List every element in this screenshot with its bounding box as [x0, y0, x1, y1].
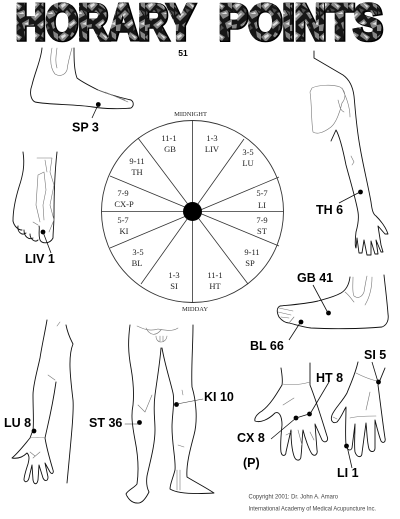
point: LU 8	[32, 429, 36, 433]
wheel labels: SP	[245, 258, 255, 268]
label: CX 8: CX 8	[237, 431, 265, 445]
point: BL 66	[289, 320, 303, 340]
wheel labels: 1-3	[168, 270, 180, 280]
wheel labels: 5-7	[256, 188, 268, 198]
wheel labels: 9-11	[129, 156, 145, 166]
clock wheel chart	[102, 111, 284, 313]
label: ST 36: ST 36	[89, 416, 122, 430]
wheel labels: MIDDAY	[182, 306, 208, 313]
label: BL 66: BL 66	[250, 339, 284, 353]
wheel labels: 3-5	[242, 147, 254, 157]
legs: ST 36 and KI 10	[89, 325, 234, 503]
label: LIV 1: LIV 1	[25, 252, 55, 266]
point: SI 5	[372, 362, 381, 384]
wheel labels: 3-5	[132, 247, 144, 257]
title	[15, 0, 383, 50]
label: LI 1: LI 1	[337, 466, 359, 480]
copyright: International Academy of Medical Acupuncture Inc.	[248, 506, 376, 512]
wheel labels: ST	[257, 226, 268, 236]
label: GB 41: GB 41	[297, 271, 333, 285]
wheel labels: KI	[120, 226, 129, 236]
arm: TH 6	[310, 51, 388, 255]
wheel labels: 11-1	[161, 133, 177, 143]
palm hand: HT 8 and CX 8	[237, 363, 343, 470]
point: TH 6	[339, 190, 363, 203]
point: LIV 1	[41, 230, 51, 253]
wheel labels: LI	[258, 200, 266, 210]
wheel labels: 1-3	[206, 133, 218, 143]
wheel labels: MIDNIGHT	[174, 111, 207, 118]
center dot	[183, 202, 202, 221]
wheel labels: GB	[164, 144, 176, 154]
wheel labels: LIV	[205, 144, 220, 154]
point: HT 8	[307, 382, 329, 416]
label: HT 8: HT 8	[316, 371, 343, 385]
point: SP 3	[92, 102, 101, 118]
wheel labels: SI	[170, 281, 178, 291]
copyright: Copyright 2001: Dr. John A. Amaro	[248, 494, 338, 500]
point: KI 10	[174, 399, 203, 407]
point: GB 41	[313, 285, 331, 315]
wheel labels: 7-9	[256, 215, 268, 225]
foot: SP 3	[31, 48, 133, 134]
point: ST 36	[125, 420, 142, 425]
label: LU 8: LU 8	[4, 416, 31, 430]
wheel labels: BL	[132, 258, 142, 268]
back hand: SI 5 and LI 1	[331, 348, 386, 480]
foot: LIV 1	[13, 152, 57, 266]
page number: 51	[178, 48, 188, 58]
label: KI 10: KI 10	[204, 390, 234, 404]
copyright	[248, 494, 376, 512]
wheel labels	[114, 111, 268, 313]
point: LI 1	[344, 444, 352, 468]
label: SI 5: SI 5	[364, 348, 386, 362]
label: SP 3: SP 3	[72, 120, 99, 134]
foot: GB 41 and BL 66	[250, 271, 388, 353]
wheel labels: 9-11	[244, 247, 260, 257]
wheel labels: 11-1	[207, 270, 223, 280]
wheel labels: 7-9	[117, 188, 129, 198]
label: (P): (P)	[243, 456, 260, 470]
wheel labels: CX-P	[114, 199, 134, 209]
wheel labels: 5-7	[117, 215, 129, 225]
wheel labels: LU	[242, 158, 254, 168]
wheel labels: HT	[209, 281, 221, 291]
arm: LU 8	[4, 320, 73, 484]
wheel labels: TH	[131, 167, 143, 177]
point: CX 8	[271, 414, 309, 439]
label: TH 6: TH 6	[316, 203, 343, 217]
